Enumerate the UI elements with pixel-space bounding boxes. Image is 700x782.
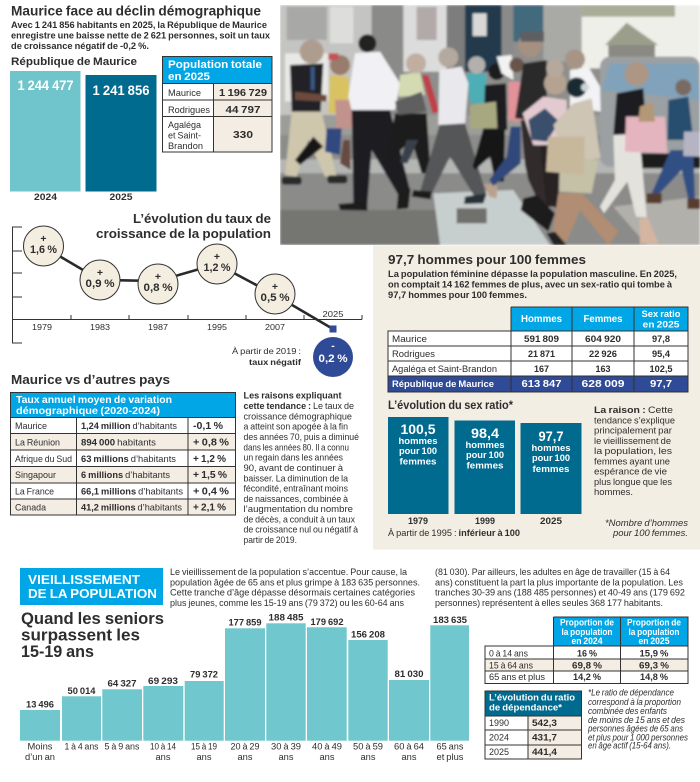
point: 2007 +0,5 %	[255, 274, 295, 314]
table: taux annuel moyen: + 1,2 %	[193, 453, 227, 465]
table: ratio de dépendance: 2024	[489, 732, 509, 744]
footnote: *Nombre d’hommes	[605, 518, 688, 529]
age labels: ans	[402, 752, 417, 762]
text: les raisons expliquant cette tendance: 90, avant de continuer à	[244, 463, 344, 474]
woman with olive bag	[473, 128, 505, 182]
bar chart: population 2024 vs 2025: 1 244 477	[18, 78, 74, 93]
bar 1979: pour 100	[399, 446, 437, 457]
table: taux annuel moyen: 1,24 million d’habitants	[81, 421, 177, 432]
table: taux annuel moyen: La Réunion	[15, 438, 60, 448]
note: taux négatif: À partir de 2019 :	[232, 346, 301, 356]
table: hommes / femmes / sex ratio: 97,7	[650, 378, 672, 390]
table: proportion de la population: 16 %	[577, 648, 598, 660]
bar 2025: pour 100	[532, 453, 570, 464]
headline: Quand les seniors	[21, 610, 164, 628]
bar 1979: 1979	[408, 516, 428, 527]
value labels: 64 327	[108, 679, 136, 690]
white shirt man at back	[570, 67, 601, 112]
value labels	[26, 613, 468, 710]
intro text: on comptait 14 162 femmes de plus, avec un sex-ratio qui tombe à	[388, 280, 673, 290]
text: paragraph right: ans) constituent la part la plus importante de la population. Les	[435, 577, 683, 588]
table: hommes / femmes / sex ratio: 97,8	[652, 334, 670, 345]
bar 1999: femmes	[466, 460, 504, 472]
value labels: 177 859	[228, 618, 262, 629]
table: hommes / femmes / sex ratio: 22 926	[589, 349, 617, 360]
bar 1999: hommes	[466, 440, 504, 451]
table: hommes / femmes / sex ratio: 95,4	[652, 349, 671, 360]
age labels: 10 à 14	[150, 742, 176, 752]
text: la raison: la population, les	[594, 446, 672, 457]
value labels: 13 496	[26, 699, 54, 710]
point: 2025 -0,2 %: -	[331, 340, 335, 352]
table: ratio de dépendance: 441,4	[532, 747, 558, 758]
text: la raison: hommes.	[594, 487, 633, 498]
text: les raisons expliquant cette tendance: un regain dans les années	[244, 453, 343, 464]
table: population totale en 2025: Agaléga	[168, 120, 202, 131]
heading: Maurice vs d’autres pays	[11, 372, 170, 387]
point: 2007 +0,5 %: 0,5 %	[260, 292, 290, 304]
headline: 15-19 ans	[21, 643, 94, 661]
text: paragraph left	[170, 567, 420, 609]
year labels: 1987	[148, 322, 168, 332]
table: ratio de dépendance: 431,7	[532, 732, 557, 744]
table: proportion de la population: 69,8 %	[572, 660, 603, 672]
person 1	[285, 112, 337, 177]
age labels: ans	[320, 752, 335, 762]
heading	[96, 211, 271, 241]
table: taux annuel moyen: 894 000 habitants	[81, 438, 156, 448]
table: ratio de dépendance: 1990	[489, 718, 509, 729]
bar chart: population 2024 vs 2025	[10, 71, 156, 203]
table: population totale en 2025: 1 196 729	[219, 87, 267, 99]
text: les raisons expliquant cette tendance: Les raisons expliquant	[244, 391, 342, 402]
van	[600, 57, 700, 167]
age labels: Moins	[28, 742, 53, 752]
table: hommes / femmes / sex ratio: Rodrigues	[392, 349, 435, 360]
heading: évolution du sex ratio: L’évolution du sex ratio*	[388, 400, 513, 412]
text: la raison: femmes ayant une	[594, 456, 670, 468]
trend line	[44, 247, 333, 329]
bar 1979: femmes	[400, 456, 436, 468]
age labels	[25, 742, 464, 762]
text: les raisons expliquant cette tendance: a atteint son apogée à la fin	[244, 422, 348, 433]
point: 1979 +1,6 %	[24, 226, 64, 266]
table: proportion de la population: 14,2 %	[573, 672, 602, 683]
table: taux annuel moyen: 66,1 millions d’habitants	[81, 486, 183, 498]
year labels	[32, 309, 344, 332]
text: paragraph right: (81 030). Par ailleurs, les adultes en âge de travailler (15 à 64	[435, 567, 670, 578]
table: proportion de la population: Proportion de	[627, 618, 681, 628]
point: 1987 +0,8 %	[138, 264, 178, 304]
footnote	[605, 518, 688, 539]
text: paragraph right	[435, 567, 685, 609]
table: hommes / femmes / sex ratio: Femmes	[584, 313, 623, 325]
text: la raison: tendance s’explique	[594, 416, 675, 426]
table: taux annuel moyen: démographique (2020-2024)	[16, 405, 160, 417]
table: hommes / femmes / sex ratio: 102,5	[650, 364, 673, 375]
intro text: Avec 1 241 856 habitants en 2025, la République de Maurice	[11, 20, 267, 31]
point: 1995 +1,2 %	[197, 244, 237, 284]
photo: crowd crossing a street	[280, 5, 700, 245]
intro text	[11, 20, 271, 52]
table: proportion de la population: 15,9 %	[640, 648, 669, 660]
table: population totale en 2025	[162, 56, 272, 152]
person 4	[387, 113, 431, 173]
table: hommes / femmes / sex ratio: Hommes	[521, 313, 562, 325]
table: population totale en 2025: Maurice	[168, 88, 201, 99]
table: population totale en 2025: Rodrigues	[168, 105, 210, 116]
text: les raisons expliquant cette tendance: fécondité, entraînant moins	[244, 484, 348, 495]
age labels: 40 à 49	[312, 742, 342, 752]
footnote: ratio de dépendance: *Le ratio de dépendance	[588, 688, 674, 698]
text: les raisons expliquant cette tendance: cette tendance : Le taux de	[244, 401, 354, 412]
table: population totale en 2025: Brandon	[168, 141, 203, 152]
table: hommes / femmes / sex ratio: République de Maurice	[392, 379, 494, 390]
bar 2025	[520, 423, 582, 527]
point: 2025 -0,2 %: 0,2 %	[318, 353, 348, 365]
text: la raison: La raison : Cette	[594, 405, 673, 416]
intro text: de croissance négatif de -0,2 %.	[11, 41, 149, 52]
table: proportion de la population: en 2025	[638, 636, 670, 647]
table: proportion de la population: en 2024	[572, 636, 603, 647]
table: hommes / femmes / sex ratio: en 2025	[642, 320, 680, 330]
bar chart: population by age group	[20, 613, 469, 762]
year labels: 2007	[265, 322, 285, 332]
point: 1979 +1,6 %: +	[40, 233, 47, 245]
teal person	[467, 73, 487, 103]
text: la raison: le vieillissement de	[594, 436, 671, 447]
age labels: 50 à 59	[353, 742, 383, 752]
text: la raison: plus longue que les	[594, 477, 672, 488]
point: 1987 +0,8 %: 0,8 %	[144, 282, 173, 294]
table: hommes / femmes / sex ratio: 628 009	[582, 378, 625, 390]
table: hommes / femmes / sex ratio: Maurice	[392, 334, 427, 345]
text: paragraph right: tranches 30-39 ans (188 485 personnes) et 40-49 ans (179 692	[435, 588, 685, 599]
table: taux annuel moyen: + 0,8 %	[193, 436, 230, 448]
table: taux annuel moyen: 41,2 millions d’habitants	[81, 502, 182, 514]
table: ratio de dépendance: L’évolution du ratio	[489, 692, 575, 704]
bar 1999: 1999	[475, 516, 495, 527]
bar 2025: hommes	[532, 443, 570, 454]
panel: sex ratio	[373, 246, 700, 550]
year labels: 1979	[32, 322, 52, 332]
age labels: ans	[196, 752, 212, 762]
age labels: et plus	[436, 752, 464, 762]
table: hommes / femmes / sex ratio	[388, 307, 688, 392]
table: proportion de la population: la population	[628, 627, 680, 638]
text: les raisons expliquant cette tendance: croissance démographique	[244, 411, 352, 422]
table: taux annuel moyen: Canada	[15, 502, 47, 514]
bar 1979	[388, 417, 448, 527]
bar 1999	[454, 420, 515, 527]
value labels: 183 635	[433, 615, 468, 626]
text: paragraph left: Le vieillissement de la population s’accentue. Pour cause, la	[170, 567, 408, 578]
intro text: 97,7 hommes pour 100 femmes.	[388, 290, 527, 301]
title: Maurice face au déclin démographique	[11, 2, 261, 18]
text: les raisons expliquant cette tendance	[244, 391, 359, 546]
table: population totale en 2025: 330	[233, 129, 253, 141]
footnote: pour 100 femmes.	[612, 528, 688, 539]
bar chart: population 2024 vs 2025: 2024	[34, 192, 58, 203]
table: hommes / femmes / sex ratio: 604 920	[585, 334, 621, 345]
text: la raison: principalement par	[594, 426, 672, 436]
intro text: La population féminine dépasse la population masculine. En 2025,	[388, 269, 677, 280]
age labels: 60 à 64	[394, 742, 424, 752]
text: paragraph left: Cette tranche d’âge dépasse désormais certaines catégories	[170, 588, 415, 599]
table: population totale en 2025: en 2025	[168, 71, 210, 83]
table: taux annuel moyen: + 0,4 %	[193, 486, 230, 498]
table: taux annuel moyen: La France	[15, 486, 54, 498]
pink person	[508, 82, 522, 122]
year labels: 2025	[322, 309, 344, 319]
age labels: ans	[278, 752, 294, 762]
table: proportion de la population: la population	[562, 627, 613, 638]
headline	[21, 610, 164, 661]
age labels: 1 à 4 ans	[64, 742, 99, 752]
footnote: ratio de dépendance: personnes âgées de 65 ans	[587, 724, 683, 734]
text: les raisons expliquant cette tendance: de naissances, combinée à	[244, 494, 349, 505]
table: population totale en 2025: 44 797	[226, 104, 261, 116]
bar 1979: hommes	[398, 436, 438, 447]
year labels: 1983	[90, 322, 110, 332]
line chart axes	[12, 227, 362, 343]
age labels: ans	[156, 752, 171, 762]
table: hommes / femmes / sex ratio: Agaléga et Saint-Brandon	[392, 364, 497, 375]
point: 1979 +1,6 %: 1,6 %	[30, 244, 57, 256]
note: inférieur à 100: À partir de 1995 : inférieur à 100	[388, 528, 520, 539]
bar 2025: 2025	[540, 516, 563, 527]
bar chart: population 2024 vs 2025: 1 241 856	[92, 83, 150, 98]
heading: République de Maurice: République de Maurice	[11, 56, 137, 68]
note: taux négatif: taux négatif	[249, 357, 301, 367]
footnote: ratio de dépendance: et plus pour 1 000 personnes	[588, 732, 688, 742]
text: les raisons expliquant cette tendance: de décès, a conduit à un taux	[244, 514, 355, 525]
banner	[20, 568, 163, 605]
text: paragraph left: population âgée de 65 ans et plus grimpe à 183 635 personnes.	[170, 577, 420, 588]
table: proportion de la population: 15 à 64 ans	[489, 660, 533, 672]
point: 1983 +0,9 %: +	[97, 267, 103, 279]
table: taux annuel moyen: 6 millions d’habitants	[81, 470, 170, 481]
text: paragraph left: plus jeunes, comme les 15-19 ans (79 372) ou les 60-64 ans	[170, 598, 404, 609]
footnote: ratio de dépendance: correspond à la proportion	[588, 697, 681, 707]
heading: 97,7 hommes pour 100 femmes	[388, 252, 586, 267]
text: les raisons expliquant cette tendance: dans les années 80. Il a connu	[244, 442, 349, 453]
age labels: 65 ans	[436, 742, 464, 752]
tall man	[521, 120, 558, 208]
table: ratio de dépendance	[485, 691, 582, 759]
table: hommes / femmes / sex ratio: 21 871	[528, 349, 556, 360]
note: taux négatif	[232, 346, 301, 367]
point: 2007 +0,5 %: +	[272, 281, 278, 293]
table: hommes / femmes / sex ratio: 163	[596, 364, 610, 375]
table: hommes / femmes / sex ratio: 613 847	[522, 378, 562, 390]
value labels: 179 692	[310, 617, 344, 628]
footnote: ratio de dépendance: de moins de 15 ans et des	[588, 715, 685, 725]
footnote: ratio de dépendance	[587, 688, 688, 750]
banner: DE LA POPULATION	[28, 586, 157, 601]
text: les raisons expliquant cette tendance: baisser. La diminution de la	[244, 473, 349, 484]
heading: croissance de la population	[96, 226, 271, 241]
bar 1999: pour 100	[466, 450, 504, 461]
bar 2025: femmes	[532, 464, 570, 475]
text: paragraph right: personnes) représentent à elles seules 368 177 habitants.	[435, 598, 663, 609]
table: taux annuel moyen: Afrique du Sud	[15, 454, 72, 465]
age labels: 30 à 39	[271, 742, 301, 752]
bar 1979: 100,5	[400, 421, 436, 437]
age labels: 15 à 19	[191, 742, 217, 752]
table: hommes / femmes / sex ratio: Sex ratio	[642, 309, 681, 320]
table: hommes / femmes / sex ratio: 167	[534, 364, 549, 375]
age labels: d’un an	[25, 752, 55, 762]
year labels: 1995	[207, 322, 227, 332]
point: 1995 +1,2 %: 1,2 %	[204, 262, 231, 274]
table: proportion de la population: Proportion de	[560, 618, 614, 628]
age labels: ans	[238, 752, 253, 762]
right person	[652, 150, 695, 200]
table: proportion de la population: 14,8 %	[640, 672, 669, 683]
table: proportion de la population: 0 à 14 ans	[489, 648, 528, 660]
table: ratio de dépendance: 2025	[489, 747, 509, 758]
table: hommes / femmes / sex ratio: 591 809	[524, 334, 559, 345]
text: les raisons expliquant cette tendance: partir de 2019.	[244, 535, 297, 546]
footnote: ratio de dépendance: combinée des enfants	[588, 706, 667, 716]
table: population totale en 2025: et Saint-	[168, 130, 201, 142]
woman right	[600, 133, 647, 217]
age labels: 5 à 9 ans	[104, 742, 140, 752]
woman pink shirt with blue bag	[523, 97, 567, 147]
banner: VIEILLISSEMENT	[28, 572, 140, 587]
table: taux annuel moyen	[10, 392, 236, 515]
age labels: ans	[360, 752, 376, 762]
point: 1987 +0,8 %: +	[155, 271, 161, 283]
bars	[20, 623, 469, 741]
table: taux annuel moyen: Maurice	[15, 421, 47, 432]
person 2	[328, 75, 352, 113]
footnote: ratio de dépendance: en âge actif (15-64 ans).	[588, 740, 671, 750]
table: proportion de la population: 65 ans et plus	[489, 672, 545, 683]
text: les raisons expliquant cette tendance: de croissance nul ou négatif à	[244, 525, 359, 536]
point: 1995 +1,2 %: +	[214, 251, 220, 263]
bar 1999: 98,4	[471, 425, 499, 441]
person 3 white shirt	[352, 110, 410, 204]
point: 1983 +0,9 %	[80, 260, 120, 300]
panel: Maurice vs d'autres pays	[10, 372, 359, 546]
intro text	[388, 269, 677, 301]
point: 1983 +0,9 %: 0,9 %	[86, 278, 115, 290]
point: 2025 -0,2 %	[313, 326, 353, 377]
text: les raisons expliquant cette tendance: des années 70, puis a diminué	[244, 432, 359, 443]
intro text: enregistre une baisse nette de 2 621 personnes, soit un taux	[11, 30, 271, 42]
panel: évolution du taux de croissance	[12, 211, 362, 377]
table: population totale en 2025: Population totale	[168, 59, 262, 71]
table: proportion de la population: 69,3 %	[639, 660, 670, 672]
woman beige coat	[552, 193, 618, 245]
text: la raison	[594, 405, 675, 498]
value labels: 69 293	[148, 676, 178, 687]
value labels: 79 372	[190, 669, 218, 680]
table: taux annuel moyen: + 1,5 %	[193, 469, 228, 481]
table: proportion de la population	[485, 617, 688, 684]
value labels: 156 208	[351, 629, 385, 640]
value labels: 50 014	[68, 686, 96, 697]
table: taux annuel moyen: Singapour	[15, 470, 56, 481]
table: ratio de dépendance: de dépendance*	[489, 702, 562, 714]
table: taux annuel moyen: Taux annuel moyen de variation	[16, 394, 172, 406]
panel: vieillissement de la population	[20, 567, 688, 762]
bar chart: population 2024 vs 2025: 2025	[110, 192, 133, 203]
table: taux annuel moyen: 63 millions d’habitants	[81, 454, 176, 465]
person 5	[420, 123, 486, 197]
bar 2025: 97,7	[538, 428, 564, 444]
table: taux annuel moyen: + 2,1 %	[193, 502, 227, 514]
heading: L’évolution du taux de	[133, 211, 271, 226]
value labels: 81 030	[394, 669, 424, 680]
table: ratio de dépendance: 542,3	[532, 718, 557, 729]
panel: déclin démographique	[10, 2, 272, 203]
headline: surpassent les	[21, 626, 140, 644]
text: la raison: espérance de vie	[594, 466, 667, 478]
table: taux annuel moyen: -0,1 %	[193, 420, 224, 432]
age labels: 20 à 29	[230, 742, 260, 752]
value labels: 188 485	[268, 613, 304, 624]
text: les raisons expliquant cette tendance: l’augmentation du nombre	[244, 504, 353, 515]
